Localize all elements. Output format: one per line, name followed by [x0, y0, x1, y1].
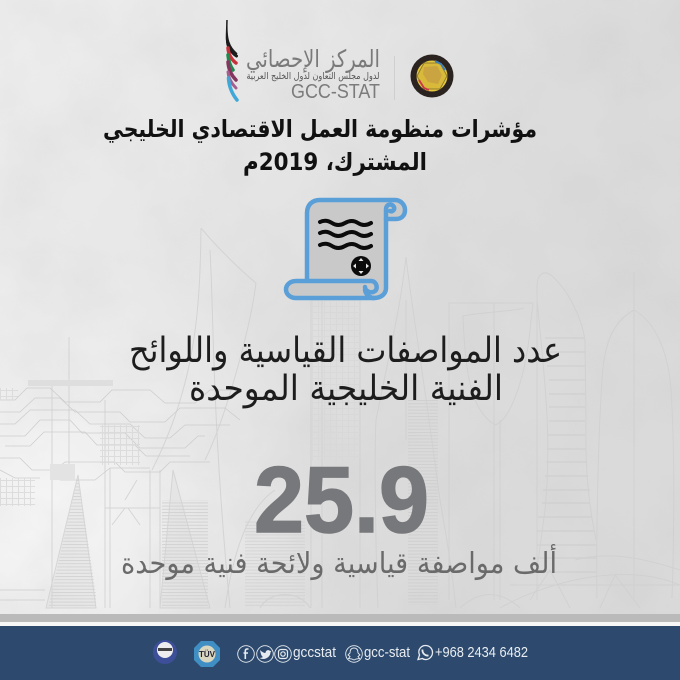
title: مؤشرات منظومة العمل الاقتصادي الخليجي — [103, 115, 537, 143]
big number: 25.9 — [254, 447, 429, 552]
divider — [394, 56, 395, 100]
footer band — [0, 614, 680, 680]
logo heading: المركز الإحصائي — [246, 45, 380, 73]
unit label: ألف مواصفة قياسية ولائحة فنية موحدة — [121, 543, 557, 580]
icon lines: wavy text — [320, 221, 371, 248]
tower: ladder block — [225, 300, 360, 608]
social icons: facebook, twitter, instagram — [238, 646, 291, 662]
handle: gccstat: gccstat — [293, 644, 337, 661]
tower: central twin spire — [375, 257, 456, 608]
phone number: +968 2434 6482 — [435, 644, 528, 661]
icon: snapchat — [346, 646, 362, 662]
logo: GCC-STAT — [226, 20, 454, 103]
heading: indicator name — [129, 331, 562, 409]
low domed buildings — [0, 556, 680, 608]
circuit board pattern — [0, 380, 240, 506]
title: المشترك، 2019م — [243, 148, 427, 176]
title — [103, 115, 537, 176]
tower: rounded ladder — [537, 273, 597, 600]
badge: TUV: TÜV — [199, 650, 216, 659]
icon: seal — [351, 256, 371, 276]
tower: left sail spire — [150, 228, 256, 608]
tower: triangles — [46, 337, 210, 608]
icon: ribbon mark — [226, 20, 237, 100]
heading: indicator name: الفنية الخليجية الموحدة — [189, 369, 503, 409]
icon: whatsapp — [418, 646, 432, 660]
badge: TUV — [194, 641, 220, 667]
heading: indicator name: عدد المواصفات القياسية واللوائح — [129, 331, 562, 371]
logo subheading: لدول مجلس التعاون لدول الخليج العربية — [246, 71, 380, 82]
handle: gcc-stat: gcc-stat — [364, 644, 411, 661]
tower: right spire — [597, 272, 674, 598]
badge: certification — [153, 640, 177, 664]
tower: twin sails — [449, 303, 533, 600]
background skyline illustration — [0, 228, 680, 608]
icon: GCC emblem — [410, 54, 454, 98]
icon: scroll document — [286, 200, 405, 298]
logo wordmark: GCC-STAT — [291, 80, 380, 103]
